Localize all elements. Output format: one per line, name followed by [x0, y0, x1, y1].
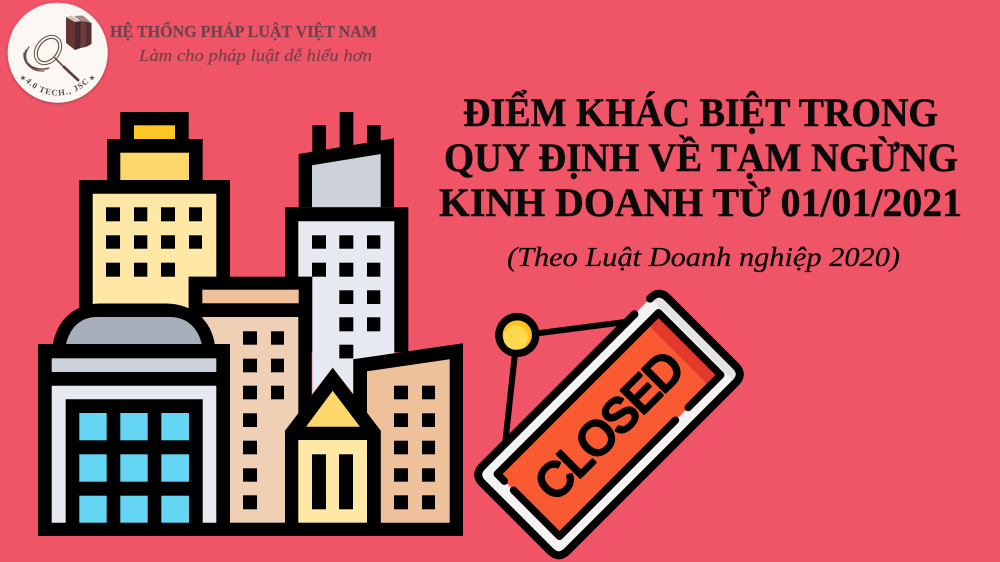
- logo stars: ★: [89, 75, 95, 82]
- sign text: CLOSED: [524, 340, 694, 510]
- illustration: closed sign: [474, 289, 744, 560]
- icon: gavel: [24, 30, 78, 80]
- building: right block: [353, 343, 463, 536]
- building: domed front block: [38, 304, 230, 536]
- logo stars: [20, 75, 95, 82]
- hanging strings: [505, 322, 629, 445]
- title: [439, 89, 962, 225]
- building: peach block: [189, 277, 312, 536]
- logo: [6, 2, 109, 105]
- title: KINH DOANH TỪ 01/01/2021: [439, 180, 962, 225]
- title: QUY ĐỊNH VỀ TẠM NGỪNG: [444, 135, 958, 180]
- building: yellow tower: [79, 112, 230, 330]
- icon: law books: [66, 16, 92, 50]
- building: white tower: [285, 112, 408, 394]
- tagline: Làm cho pháp luật dễ hiểu hơn: [138, 46, 372, 65]
- logo stars: ★: [20, 75, 26, 82]
- heading: organisation name: HỆ THỐNG PHÁP LUẬT VIỆT NAM: [110, 21, 377, 41]
- sign board: [474, 289, 744, 560]
- subtitle: (Theo Luật Doanh nghiệp 2020): [507, 242, 900, 272]
- title: ĐIỂM KHÁC BIỆT TRONG: [463, 89, 938, 135]
- logo text: 4.0 TECH., JSC: [26, 78, 88, 96]
- illustration: city buildings: [38, 112, 463, 536]
- building: small house: [285, 368, 381, 536]
- pin: [499, 317, 536, 353]
